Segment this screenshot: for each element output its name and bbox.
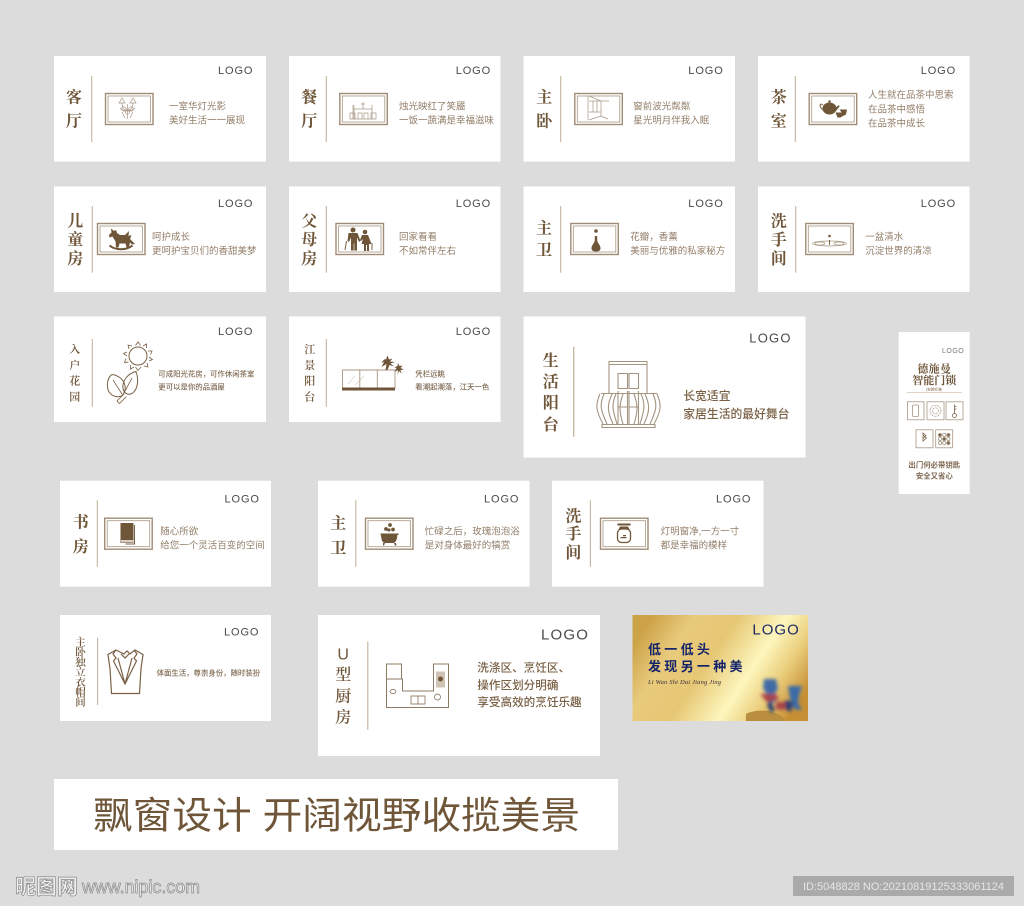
heading: 发现另一种美	[648, 659, 746, 674]
description: 沉淀世界的清凉	[865, 245, 932, 257]
title: 主	[536, 220, 552, 238]
icon: teapot	[809, 94, 857, 124]
description: 美丽与优雅的私家秘方	[630, 245, 725, 257]
icons: unlock methods	[908, 402, 963, 448]
icon: suit jacket	[108, 650, 143, 694]
logo: LOGO	[752, 622, 800, 638]
description: 看潮起潮落，江天一色	[415, 382, 490, 391]
title: 德施曼	[917, 362, 951, 376]
title: 洗	[771, 212, 787, 230]
panel: 书房	[60, 481, 271, 587]
description: 操作区划分明确	[477, 678, 558, 692]
title: 卫	[330, 540, 346, 558]
description: 美好生活一一展现	[169, 114, 246, 126]
title: 户	[69, 358, 80, 372]
description: 安全又省心	[916, 471, 953, 480]
watermark: nipic logo	[15, 876, 200, 899]
panel: 茶室	[758, 56, 970, 162]
description: 花瓣，香薰	[630, 231, 678, 243]
title: 园	[69, 391, 80, 404]
icon: balcony with door	[597, 362, 660, 428]
logo: LOGO	[688, 198, 724, 210]
title: 客	[66, 88, 82, 106]
logo: LOGO	[218, 65, 253, 77]
description: 可成阳光花房，可作休闲茶室	[158, 370, 254, 379]
title: 手	[771, 231, 787, 249]
description: 享受高效的烹饪乐趣	[477, 695, 582, 709]
description: 出门何必带钥匙	[908, 460, 961, 469]
blurred figures	[760, 679, 802, 713]
panel: 主卧	[524, 56, 735, 162]
description: 家居生活的最好舞台	[683, 407, 789, 421]
pinyin line: Li Wan Shi Dai Jiang Jing	[647, 679, 722, 686]
description: 灯明窗净,一方一寸	[661, 525, 740, 537]
title: 厅	[301, 112, 317, 130]
title: 卧	[75, 646, 86, 658]
watermark: nipic logo: 昵图网	[15, 876, 78, 899]
title: 独	[75, 656, 87, 668]
icon: river balcony with palms	[342, 356, 404, 390]
title: 主	[75, 636, 86, 648]
logo: LOGO	[749, 331, 792, 346]
description: 星光明月伴我入眠	[633, 114, 710, 126]
description: 更呵护宝贝们的香甜美梦	[152, 245, 257, 257]
logo: LOGO	[921, 198, 956, 210]
description: 回家看看	[399, 231, 437, 243]
title: 卧	[536, 112, 554, 130]
title: 书	[73, 512, 90, 532]
description: 洗涤区、烹饪区、	[477, 660, 570, 674]
panel: 智能门锁	[899, 332, 970, 494]
description: 都是幸福的模样	[661, 540, 727, 552]
logo: LOGO	[688, 65, 724, 77]
description: 体面生活，尊崇身份，随时装扮	[157, 668, 261, 677]
title: 智能门锁	[912, 373, 957, 387]
title: 房	[73, 537, 89, 556]
watermark: image id: ID:5048828 NO:20210819125333061124	[803, 881, 1004, 893]
title: 父	[301, 214, 318, 230]
panel: 洗手间	[758, 186, 970, 292]
title: 厨	[335, 688, 351, 706]
title: 阳	[543, 394, 559, 412]
title: 手	[565, 525, 581, 543]
icon: bay window	[575, 94, 622, 124]
icon: rocking horse	[98, 224, 145, 254]
panel: 儿童房	[54, 186, 266, 292]
icon: water ripple	[806, 224, 853, 254]
panel: U型厨房	[318, 615, 600, 756]
title: 台	[304, 390, 316, 404]
logo: LOGO	[942, 348, 964, 355]
title: 江	[304, 343, 315, 356]
panel: 主卫	[524, 186, 735, 292]
description: 给您一个灵活百变的空间	[160, 540, 265, 552]
title: 帽	[75, 686, 86, 698]
banner text: 飘窗设计 开阔视野收揽美景	[93, 794, 580, 836]
title: 童	[67, 231, 83, 249]
icon: U-shaped kitchen plan	[386, 664, 448, 708]
title: 立	[75, 666, 86, 678]
title: 景	[304, 359, 315, 372]
title: 主	[536, 88, 552, 106]
icon: book	[105, 518, 152, 549]
panel: 客厅	[54, 56, 266, 162]
icon: vase	[571, 224, 618, 254]
logo: LOGO	[484, 494, 519, 506]
icon: leaves	[107, 372, 138, 404]
title: 型	[335, 666, 351, 684]
title: 厅	[66, 112, 82, 130]
logo: LOGO	[541, 626, 589, 643]
title: 活	[543, 372, 559, 391]
description: 长宽适宜	[683, 389, 731, 403]
banner: 飘窗设计	[54, 779, 618, 850]
logo: LOGO	[456, 198, 491, 210]
title: 卫	[536, 242, 552, 260]
icon: sun	[124, 342, 152, 370]
title: 间	[565, 543, 581, 562]
panel: 江景阳台	[289, 316, 500, 422]
description: 烛光映红了笑靥	[399, 100, 466, 112]
panel: 入户花园	[54, 316, 266, 422]
title: 儿	[67, 212, 83, 230]
watermark: nipic logo: www.nipic.com	[81, 877, 200, 897]
logo: LOGO	[218, 326, 253, 338]
logo: LOGO	[224, 494, 260, 506]
icon: elderly couple	[336, 224, 384, 254]
icon: glass jar	[600, 518, 648, 549]
heading: 低一低头	[648, 642, 713, 657]
description: 是对身体最好的犒赏	[425, 540, 510, 552]
title: 房	[335, 708, 351, 726]
title: 主	[330, 514, 346, 532]
title: 餐	[301, 88, 317, 106]
description: 随心所欲	[160, 525, 199, 537]
title: 室	[771, 112, 787, 130]
description: 不如常伴左右	[399, 245, 456, 257]
title: 花	[69, 374, 80, 388]
title: 衣	[75, 676, 86, 688]
title: 茶	[771, 88, 787, 106]
panel: 父母房	[289, 186, 500, 292]
gold stack	[746, 711, 785, 721]
description: 一饭一蔬满是幸福滋味	[399, 114, 495, 126]
panel: 低一低头 gold sign	[632, 615, 808, 721]
title: 阳	[304, 375, 315, 388]
panel: 主卧独立衣帽间	[60, 615, 271, 721]
description: 忙碌之后，玫瑰泡泡浴	[425, 525, 520, 537]
watermark: image id	[793, 876, 1014, 896]
logo: LOGO	[218, 198, 253, 210]
icon: chandelier	[106, 94, 153, 124]
title: 台	[543, 416, 560, 434]
description: 在品茶中感悟	[868, 103, 926, 115]
icon: bathtub with flowers	[366, 518, 413, 549]
logo: LOGO	[224, 627, 259, 639]
description: 一盆清水	[865, 231, 904, 243]
title: 房	[301, 249, 317, 268]
panel: 主卫 浴缸	[318, 481, 530, 587]
title: 房	[67, 249, 83, 268]
description: 凭栏远眺	[415, 370, 445, 379]
title: U	[337, 646, 349, 664]
panel: 洗手间 罐	[552, 481, 764, 587]
title: 间	[75, 696, 86, 708]
logo: LOGO	[456, 326, 491, 338]
title: 生	[543, 352, 559, 370]
title: 母	[301, 231, 317, 249]
logo: LOGO	[716, 494, 751, 506]
logo: LOGO	[456, 65, 491, 77]
subtitle: (安装标准)	[926, 386, 942, 392]
panel: 生活阳台	[524, 316, 806, 458]
description: 在品茶中成长	[868, 118, 926, 130]
description: 人生就在品茶中思索	[868, 89, 954, 101]
title: 入	[69, 343, 80, 356]
panel: 餐厅	[289, 56, 500, 162]
description: 更可以是你的品酒屋	[158, 382, 225, 391]
icon: dining table	[340, 94, 387, 124]
description: 窗前波光粼粼	[633, 100, 691, 112]
description: 呵护成长	[152, 231, 191, 243]
logo: LOGO	[921, 65, 956, 77]
title: 间	[771, 249, 787, 268]
title: 洗	[565, 506, 581, 526]
description: 一室华灯光影	[169, 100, 227, 112]
